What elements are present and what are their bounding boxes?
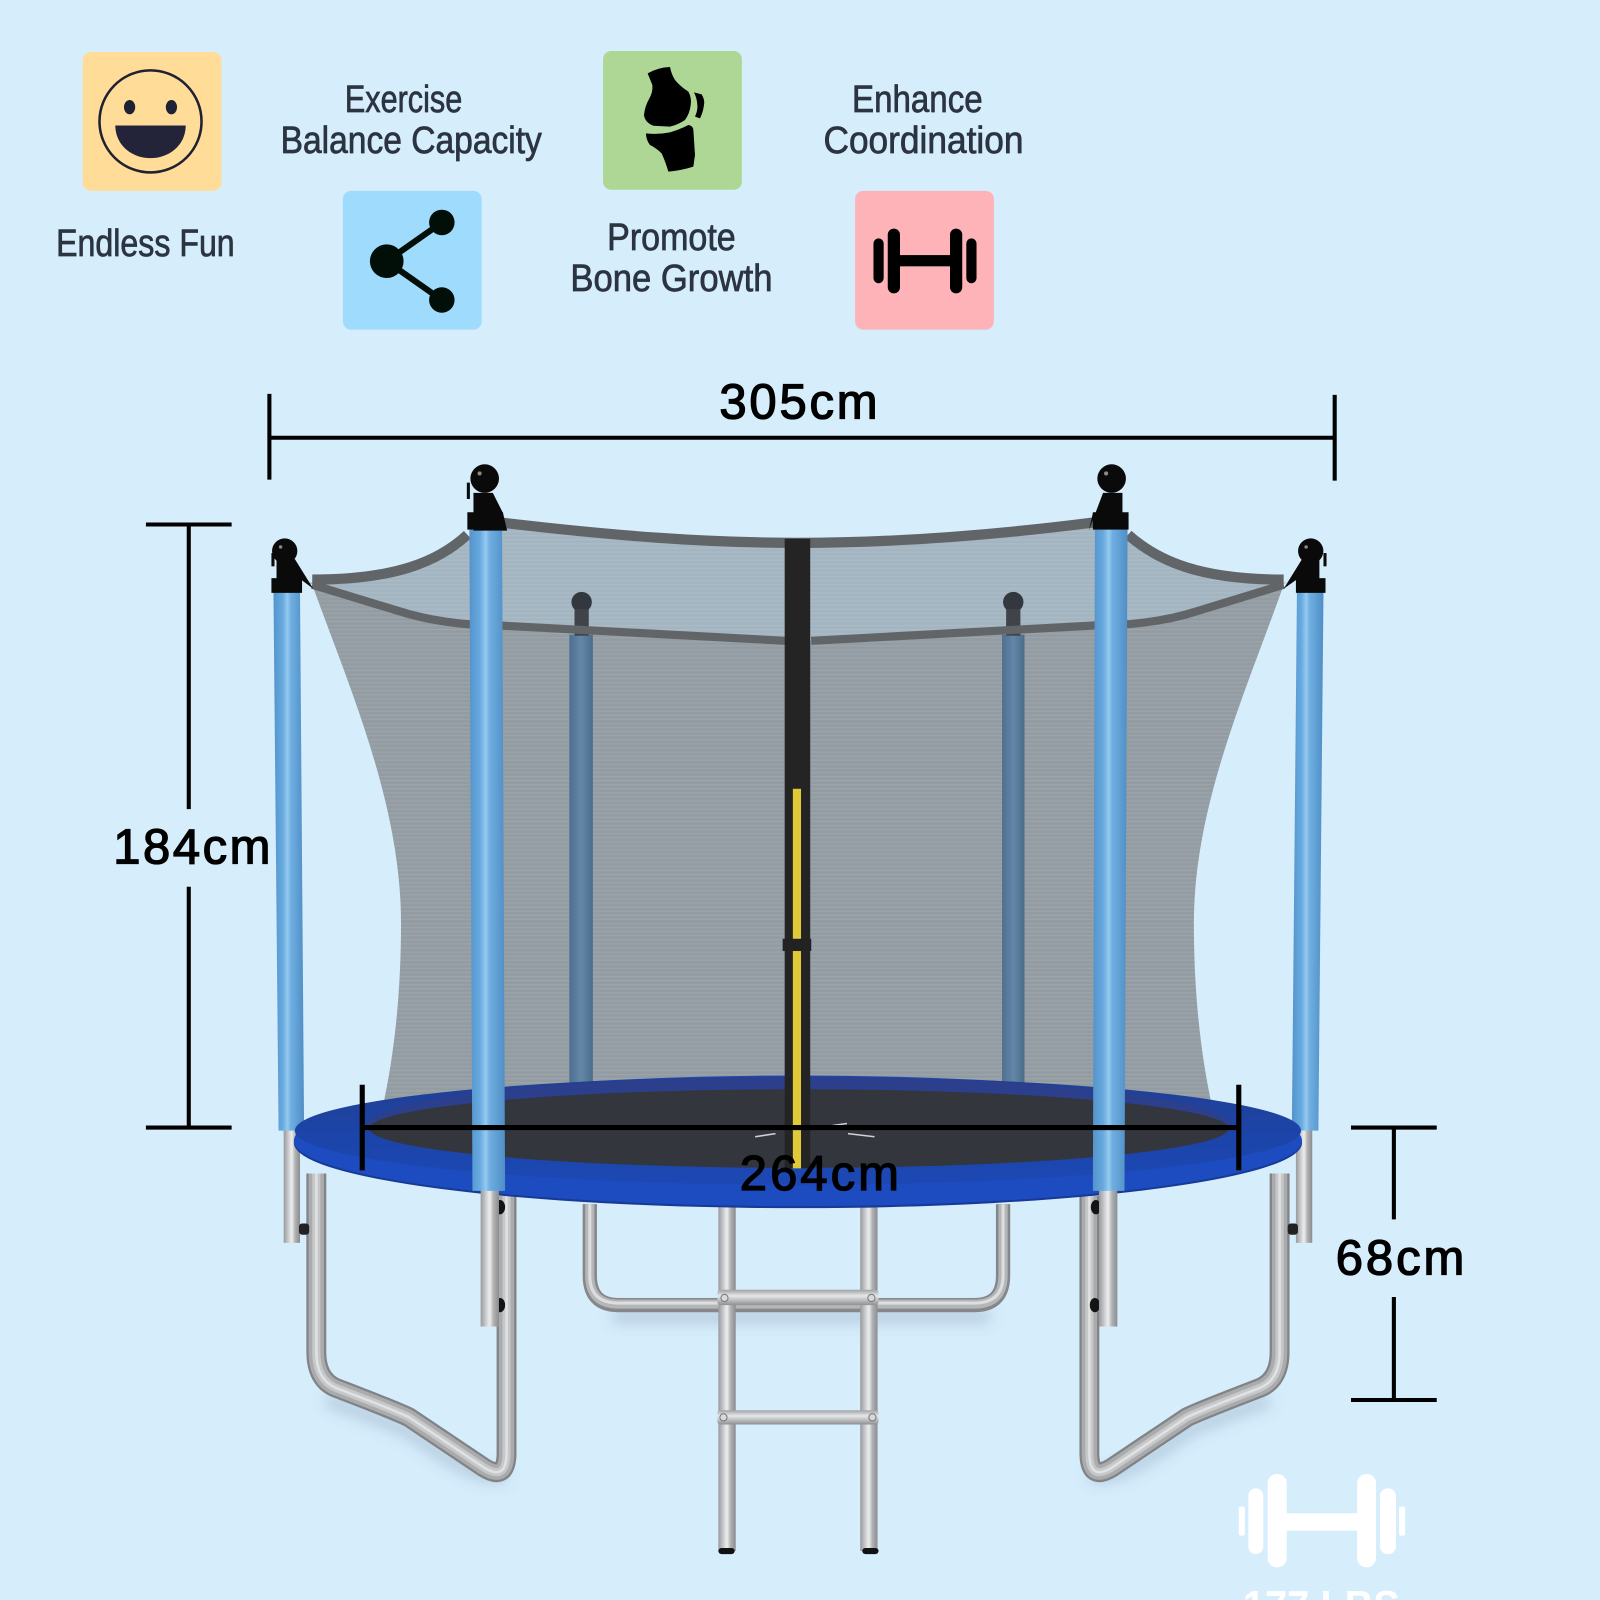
inner pole sleeves — [481, 1189, 1117, 1327]
outer poles — [273, 592, 1323, 1131]
safety net upper — [306, 520, 1288, 641]
icon: dumbbell on pink tile — [855, 191, 994, 330]
icon: smiley on yellow tile — [83, 52, 221, 191]
text: Enhance Coordination: Coordination — [823, 119, 1023, 161]
inner poles — [469, 529, 1128, 1191]
dimension: frame height 68cm — [1336, 1128, 1464, 1400]
dimension: mat diameter 264cm: 264cm — [740, 1147, 899, 1201]
text: Enhance Coordination: Enhance — [852, 78, 983, 120]
text: Exercise Balance Capacity — [281, 78, 542, 161]
text: Exercise Balance Capacity: Balance Capacity — [281, 119, 542, 161]
text: Promote Bone Growth: Promote — [607, 216, 736, 258]
net mesh texture — [313, 520, 1283, 1107]
safety net lower — [313, 588, 1283, 1133]
icon: knee joint on green tile — [603, 51, 742, 190]
text: Promote Bone Growth — [570, 216, 772, 299]
door strap — [783, 539, 811, 1168]
trampoline illustration — [271, 464, 1327, 1554]
rear poles — [569, 592, 1024, 1089]
dimension: mat diameter 264cm — [362, 1085, 1239, 1201]
dimension: width 305cm — [269, 375, 1335, 481]
dimension: frame height 68cm: 68cm — [1336, 1231, 1464, 1285]
text: Endless Fun: Endless Fun — [56, 222, 235, 264]
outer pole sleeves — [284, 1128, 1312, 1243]
text: Enhance Coordination — [823, 78, 1023, 161]
pole caps — [271, 464, 1327, 593]
text: Exercise Balance Capacity: Exercise — [345, 78, 462, 120]
dimension: width 305cm: 305cm — [719, 375, 878, 429]
dimension: net height 184cm — [113, 524, 270, 1128]
dimension: net height 184cm: 184cm — [113, 820, 270, 874]
rear leg — [590, 1204, 1003, 1305]
padded ring and jump mat — [294, 1076, 1302, 1208]
left and right legs — [316, 1173, 1280, 1472]
floor shadows — [327, 1316, 1269, 1476]
text: Promote Bone Growth: Bone Growth — [570, 257, 772, 299]
ladder — [717, 1204, 879, 1554]
icon: share nodes on blue tile — [343, 191, 482, 330]
icon: white dumbbell weight limit — [1239, 1474, 1405, 1567]
net bands — [312, 522, 1284, 641]
